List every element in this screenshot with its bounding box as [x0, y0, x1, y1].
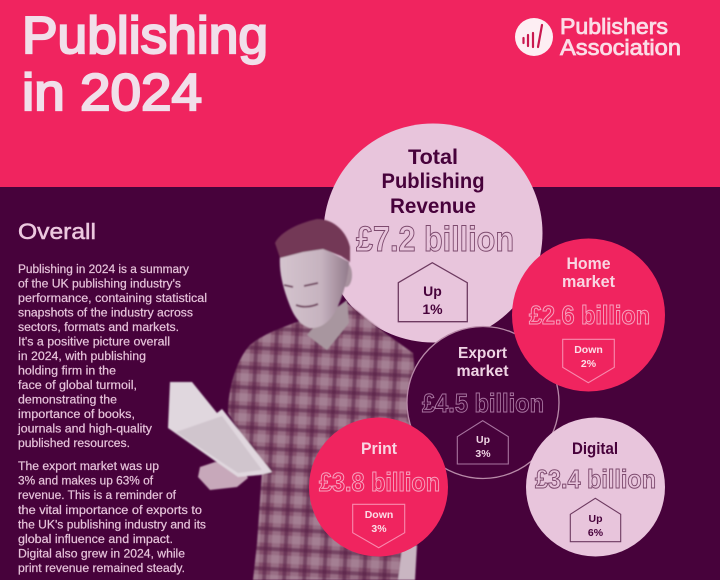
hand: [198, 462, 248, 490]
face: [280, 248, 349, 328]
icon: down arrow badge, down 2%: 2%: [581, 358, 597, 370]
figure: £2.6 billion: £2.6 billion: [529, 300, 650, 330]
text block: export paragraph: the vital importance of exports to: [18, 505, 202, 517]
logo wordmark: Association: [560, 35, 681, 60]
heading: Overall: Overall: [18, 219, 96, 244]
heading: Total Publishing Revenue: [382, 146, 484, 218]
heading: Total Publishing Revenue: Revenue: [390, 195, 476, 218]
icon: up arrow badge, up 6%: [570, 498, 621, 542]
logo wordmark: Publishers: [560, 14, 668, 39]
panel: Print circle: [309, 418, 448, 556]
text block: export paragraph: Digital also grew in 2024, while: [18, 549, 185, 561]
icon: up arrow badge, up 3%: Up: [476, 434, 490, 446]
text block: intro paragraph: in 2024, with publishing: [18, 351, 146, 363]
icon: down arrow badge, down 3%: 3%: [371, 523, 387, 535]
heading: Total Publishing Revenue: Publishing: [382, 170, 484, 193]
text block: intro paragraph: Publishing in 2024 is a summary: [18, 264, 189, 276]
heading: Print: Print: [361, 440, 397, 458]
icon: down arrow badge, down 3%: Down: [365, 509, 393, 521]
panel: Total Publishing Revenue circle: [324, 124, 542, 342]
header band: [0, 0, 720, 187]
text block: intro paragraph: performance, containing statistical: [18, 293, 207, 305]
heading: Home market: market: [562, 273, 615, 291]
text block: export paragraph: [18, 461, 206, 575]
panel: Export market circle: [407, 326, 559, 478]
eyes and smile: [284, 283, 318, 307]
figure: £3.8 billion: £3.8 billion: [319, 467, 440, 497]
text block: export paragraph: print revenue remained steady.: [18, 563, 185, 575]
heading: Home market: Home: [566, 255, 610, 273]
background: dark plum panel: [0, 187, 720, 580]
icon: down arrow badge, down 3%: [353, 504, 405, 548]
text block: export paragraph: The export market was up: [18, 461, 159, 473]
icon: up arrow badge, up 1%: [398, 263, 467, 322]
heading: Digital: Digital: [572, 440, 618, 458]
text block: intro paragraph: sectors, formats and markets.: [18, 322, 179, 334]
icon: logo roundel: [515, 18, 553, 56]
text block: intro paragraph: importance of books,: [18, 409, 135, 421]
heading: Home market: [562, 255, 615, 291]
figure: £4.5 billion: £4.5 billion: [422, 388, 544, 418]
heading: Export market: [456, 345, 509, 380]
text block: export paragraph: 3% and makes up 63% of: [18, 476, 154, 488]
icon: down arrow badge, down 2%: [563, 339, 614, 383]
text block: intro paragraph: It's a positive picture overall: [18, 336, 170, 348]
hair: [275, 219, 350, 262]
title: [22, 7, 268, 122]
neck: [307, 300, 349, 350]
image: man reading a book: [168, 219, 417, 580]
text block: intro paragraph: published resources.: [18, 438, 130, 450]
heading: Export market: Export: [458, 345, 508, 362]
icon: down arrow badge, down 2%: Down: [574, 344, 603, 356]
icon: up arrow badge, up 1%: 1%: [422, 301, 443, 317]
logo wordmark: [560, 14, 681, 60]
heading: Total Publishing Revenue: Total: [408, 146, 458, 169]
heading: Export market: market: [456, 363, 509, 380]
text block: export paragraph: the UK's publishing industry and its: [18, 519, 206, 531]
icon: up arrow badge, up 6%: 6%: [588, 527, 604, 539]
logo: Publishers Association: [515, 14, 681, 60]
icon: up arrow badge, up 1%: Up: [423, 283, 442, 299]
panel: Digital circle: [526, 418, 665, 556]
text block: intro paragraph: demonstrating the: [18, 394, 117, 406]
book silhouette: [168, 382, 272, 477]
icon: up arrow badge, up 3%: 3%: [475, 448, 491, 460]
ear: [340, 263, 352, 287]
book front cover: [176, 416, 262, 473]
text block: intro paragraph: of the UK publishing industry's: [18, 278, 181, 290]
title: in 2024: [22, 64, 202, 122]
text block: export paragraph: revenue. This is a reminder of: [18, 490, 177, 502]
title: Publishing: [22, 7, 268, 65]
text block: intro paragraph: snapshots of the industry across: [18, 308, 193, 320]
icon: up arrow badge, up 6%: Up: [588, 513, 602, 525]
text block: intro paragraph: holding firm in the: [18, 366, 116, 378]
text block: intro paragraph: journals and high-quality: [17, 424, 152, 436]
figure: £3.4 billion: £3.4 billion: [535, 464, 656, 494]
text block: intro paragraph: face of global turmoil,: [18, 380, 137, 392]
text block: intro paragraph: [17, 264, 207, 450]
man's shirt: [228, 303, 417, 580]
panel: Home market circle: [512, 238, 665, 392]
undershirt patch: [398, 545, 417, 580]
figure: £7.2 billion: £7.2 billion: [356, 220, 514, 259]
icon: up arrow badge, up 3%: [457, 421, 508, 464]
text block: export paragraph: global influence and impact.: [18, 534, 173, 546]
